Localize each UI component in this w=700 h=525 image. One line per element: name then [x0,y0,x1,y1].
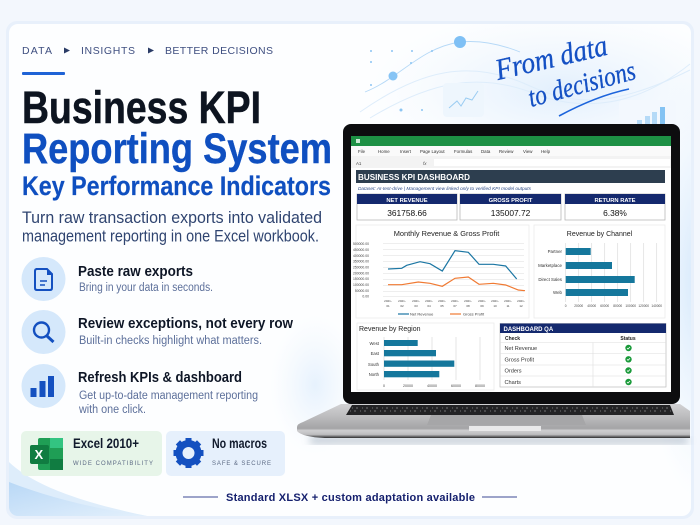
badge: Excel 2010+: WIDE COMPATIBILITY [73,461,153,467]
line chart: monthly revenue and gross profit: 05 [440,304,444,308]
badge: Excel 2010+ [21,431,162,476]
dashboard QA table: Net Revenue [504,346,537,352]
excel ribbon: A1 [356,161,362,166]
subtitle: Turn raw transaction exports into validated [22,208,322,227]
feature: refresh KPIs: Get up-to-date management reporting [79,390,258,402]
bar chart: revenue by region: 40000 [427,384,437,388]
laptop bezel [343,124,680,404]
script tagline: to decisions [525,55,639,114]
footer note: Standard XLSX + custom adaptation available [226,492,475,504]
line chart: monthly revenue and gross profit: Net Revenue [410,312,434,316]
dashboard QA table: DASHBOARD QA [504,327,554,333]
excel ribbon: Page Layout [420,149,445,154]
line chart: monthly revenue and gross profit: 11 [506,304,510,308]
bar chart: revenue by region [357,323,494,390]
feature: review exceptions [22,310,293,354]
breadcrumb: INSIGHTS [81,45,135,57]
bar chart: revenue by region: 0 [383,384,385,388]
line chart: monthly revenue and gross profit: 08 [466,304,470,308]
dashboard QA table: Status [620,336,636,342]
line chart: monthly revenue and gross profit: 07 [453,304,457,308]
bar chart: revenue by region: 20000 [403,384,413,388]
line chart: monthly revenue and gross profit: 03 [414,304,418,308]
line chart: monthly revenue and gross profit: 09 [480,304,484,308]
feature: review exceptions: Review exceptions, not every row [78,315,293,332]
bar chart: revenue by channel: 60000 [600,304,609,308]
KPI: return rate: RETURN RATE [594,198,636,204]
line chart: monthly revenue and gross profit: 01 [386,304,390,308]
dashboard title: Dataset: AI-test-drive | Management view linked only to verified KPI model outputs [358,186,532,191]
excel ribbon: fx [423,161,427,166]
dashboard QA table [500,324,666,387]
bar chart: revenue by channel: 140000 [651,304,662,308]
excel ribbon: Formulas [454,149,473,154]
icon: Excel [30,438,63,470]
script tagline [491,29,639,116]
title: Reporting System [22,125,332,173]
KPI: net revenue: 361758.66 [387,208,427,218]
breadcrumb [22,45,273,57]
bar chart: revenue by channel: Partner [548,249,563,254]
bar chart: revenue by channel: Revenue by Channel [567,231,633,238]
bar chart: revenue by channel: Direct Sales [538,277,563,282]
bar chart: revenue by region: 80000 [475,384,485,388]
bar chart: revenue by channel: 80000 [613,304,622,308]
dashboard QA table: Check [505,336,520,342]
feature: refresh KPIs [22,364,258,416]
badge: No macros [166,431,285,476]
line chart: monthly revenue and gross profit: 2021- [451,299,459,303]
excel ribbon: Insert [400,149,412,154]
breadcrumb: DATA [22,45,52,57]
title: Key Performance Indicators [22,171,331,201]
bar chart: revenue by channel: 40000 [587,304,596,308]
icon: document [22,257,66,301]
screen [351,136,671,392]
line chart: monthly revenue and gross profit: 100000.00 [353,283,369,287]
feature: refresh KPIs: Refresh KPIs & dashboard [78,369,242,386]
line chart: monthly revenue and gross profit: 2021- [504,299,512,303]
accent rule [22,72,65,75]
line chart: monthly revenue and gross profit: 04 [427,304,431,308]
excel ribbon: Data [481,149,491,154]
breadcrumb: BETTER DECISIONS [165,45,273,57]
line chart: monthly revenue and gross profit: 2021- [464,299,472,303]
bar chart: revenue by channel: Web [553,290,563,295]
icon: magnifier [22,310,66,354]
line chart: monthly revenue and gross profit: Gross Profit [463,312,485,316]
line chart: monthly revenue and gross profit: 2021- [491,299,499,303]
feature: refresh KPIs: with one click. [78,404,146,416]
KPI: net revenue [357,194,457,220]
line chart: monthly revenue and gross profit: 200000.00 [353,272,369,276]
bar chart: revenue by region: North [369,372,380,377]
KPI: return rate [565,194,665,220]
bar chart: revenue by region: West [370,341,380,346]
title: Business KPI [22,82,261,133]
icon: gear [167,432,210,474]
line chart: monthly revenue and gross profit: 0.00 [362,294,369,298]
line chart: monthly revenue and gross profit: 400000.00 [353,254,369,258]
dashboard QA table: Charts [504,380,521,386]
bar chart: revenue by region: 60000 [451,384,461,388]
KPI: gross profit: 135007.72 [491,208,531,218]
subtitle [22,208,322,246]
excel ribbon [351,136,671,168]
line chart: monthly revenue and gross profit: 10 [493,304,497,308]
subtitle: management reporting in one Excel workbook. [22,226,319,246]
bar chart: revenue by region: Revenue by Region [359,326,421,333]
excel ribbon: Help [541,149,551,154]
excel ribbon: File [358,149,366,154]
line chart: monthly revenue and gross profit: 150000.00 [353,277,369,281]
line chart: monthly revenue and gross profit: 350000.00 [353,260,369,264]
line chart: monthly revenue and gross profit: 250000.00 [353,266,369,270]
excel ribbon: View [523,149,533,154]
dashboard title [356,170,665,191]
KPI: gross profit: GROSS PROFIT [489,198,533,204]
line chart: monthly revenue and gross profit: 02 [400,304,404,308]
line chart: monthly revenue and gross profit: 50000.00 [355,289,369,293]
title [22,82,332,201]
bar chart: revenue by region: East [371,351,380,356]
line chart: monthly revenue and gross profit: 2021- [412,299,420,303]
bar chart: revenue by region: South [368,362,380,367]
excel ribbon: Home [378,149,390,154]
line chart: monthly revenue and gross profit: 12 [519,304,523,308]
line chart: monthly revenue and gross profit: 2021- [384,299,392,303]
line chart: monthly revenue and gross profit: 2021- [425,299,433,303]
dashboard title: BUSINESS KPI DASHBOARD [358,172,470,182]
line chart: monthly revenue and gross profit: 2021- [398,299,406,303]
KPI: return rate: 6.38% [603,208,627,218]
KPI: net revenue: NET REVENUE [386,198,428,204]
line chart: monthly revenue and gross profit: 2021- [438,299,446,303]
KPI: gross profit [460,194,561,220]
feature: paste raw exports [22,257,213,301]
line chart: monthly revenue and gross profit: 2021- [517,299,525,303]
laptop base [297,404,690,444]
bar chart: revenue by channel: Marketplace [538,263,563,268]
bar chart: revenue by channel: 120000 [638,304,649,308]
feature: paste raw exports: Bring in your data in seconds. [79,282,213,294]
bar chart: revenue by channel: 100000 [625,304,636,308]
line chart: monthly revenue and gross profit: 450000.00 [353,248,369,252]
badge: No macros: No macros [212,435,267,451]
dashboard QA table: Gross Profit [504,358,534,364]
line chart: monthly revenue and gross profit: 2021- [478,299,486,303]
badge: No macros: SAFE & SECURE [212,461,271,467]
feature: paste raw exports: Paste raw exports [78,263,193,280]
line chart: monthly revenue and gross profit [353,225,529,318]
script tagline: From data [491,29,611,87]
icon: Excel: X [34,447,44,462]
decorative data motif [360,36,690,126]
excel ribbon: Review [499,149,514,154]
bar chart: revenue by channel: 20000 [574,304,583,308]
line chart: monthly revenue and gross profit: Monthly Revenue & Gross Profit [394,229,499,238]
laptop [297,124,690,444]
feature: review exceptions: Built-in checks highlight what matters. [79,335,262,347]
icon: bars [22,364,66,408]
line chart: monthly revenue and gross profit: 500000.00 [353,242,369,246]
bar chart: revenue by channel [534,225,665,318]
badge: Excel 2010+: Excel 2010+ [73,435,139,451]
bar chart: revenue by channel: 0 [565,304,567,308]
dashboard QA table: Orders [504,368,522,374]
